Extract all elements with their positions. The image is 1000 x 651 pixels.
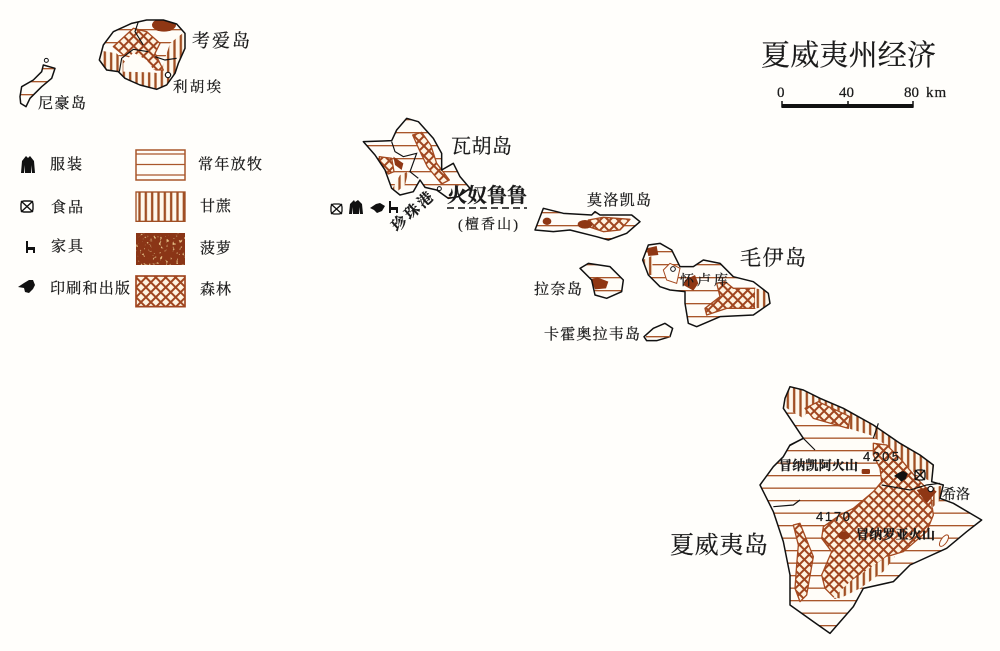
label: Kahoolawe: 卡霍奥拉韦岛 — [544, 325, 640, 343]
island: Niihau — [19, 58, 56, 108]
text: food: 食品 — [51, 199, 83, 216]
label: Hawaii island: 夏威夷岛 — [670, 532, 768, 559]
island: Oahu — [360, 113, 473, 200]
label: Kauai: 考爱岛 — [192, 31, 250, 51]
label: Maui: 毛伊岛 — [740, 246, 806, 270]
scale bar: 40 — [839, 85, 854, 101]
elevation: 4170: 4170 — [816, 509, 850, 524]
swatch: pasture — [136, 150, 185, 180]
icons: printing and food — [894, 470, 925, 482]
icon: furniture — [26, 241, 35, 253]
label: Honolulu: 火奴鲁鲁 — [447, 184, 527, 207]
label: Wailuku: 怀卢库 — [680, 272, 728, 289]
title: 夏威夷州经济 — [761, 39, 936, 72]
label: Mount Tantalus note: (檀香山) — [458, 216, 518, 233]
island: Hawaii — [757, 382, 987, 638]
text: sugarcane: 甘蔗 — [200, 198, 232, 215]
island: Lanai — [579, 262, 624, 300]
island: Maui — [640, 240, 773, 330]
elevation: 4205: 4205 — [863, 449, 899, 464]
label: Hilo: 希洛 — [942, 487, 970, 503]
scale bar — [777, 85, 947, 108]
icon: clothing — [21, 156, 35, 173]
text: furniture: 家具 — [51, 238, 84, 255]
legend: land use — [136, 150, 262, 307]
icon: food — [21, 201, 33, 212]
scale bar: 80 — [904, 85, 919, 101]
island: Kahoolawe — [644, 323, 673, 341]
swatch: forest — [136, 276, 185, 307]
island: Kauai — [98, 19, 186, 90]
label: Oahu: 瓦胡岛 — [451, 135, 512, 158]
label: Mauna Kea: 冒纳凯阿火山 — [779, 458, 858, 473]
Honolulu industry icons — [331, 200, 398, 214]
text: printing and publishing: 印刷和出版 — [50, 280, 130, 297]
dashed underline — [447, 207, 527, 209]
label: Niihau: 尼豪岛 — [38, 95, 86, 112]
swatch: sugarcane — [136, 192, 185, 221]
text: clothing: 服装 — [50, 156, 82, 173]
text: forest: 森林 — [200, 281, 231, 298]
icon: printing — [18, 280, 35, 293]
label: Mauna Loa: 冒纳罗亚火山 — [856, 527, 935, 542]
swatch: pineapple — [136, 233, 185, 265]
scale bar: 0 — [777, 85, 784, 101]
label: Lanai: 拉奈岛 — [534, 281, 582, 298]
label: Molokai: 莫洛凯岛 — [587, 191, 651, 209]
legend: industries — [18, 156, 130, 297]
island: Molokai — [534, 208, 641, 241]
text: pasture: 常年放牧 — [198, 155, 262, 173]
label: Pearl Harbor: 珍珠港 — [388, 188, 437, 235]
label: Lihue: 利胡埃 — [173, 78, 222, 96]
scale bar: km — [926, 85, 947, 101]
text: pineapple: 菠萝 — [200, 239, 231, 257]
